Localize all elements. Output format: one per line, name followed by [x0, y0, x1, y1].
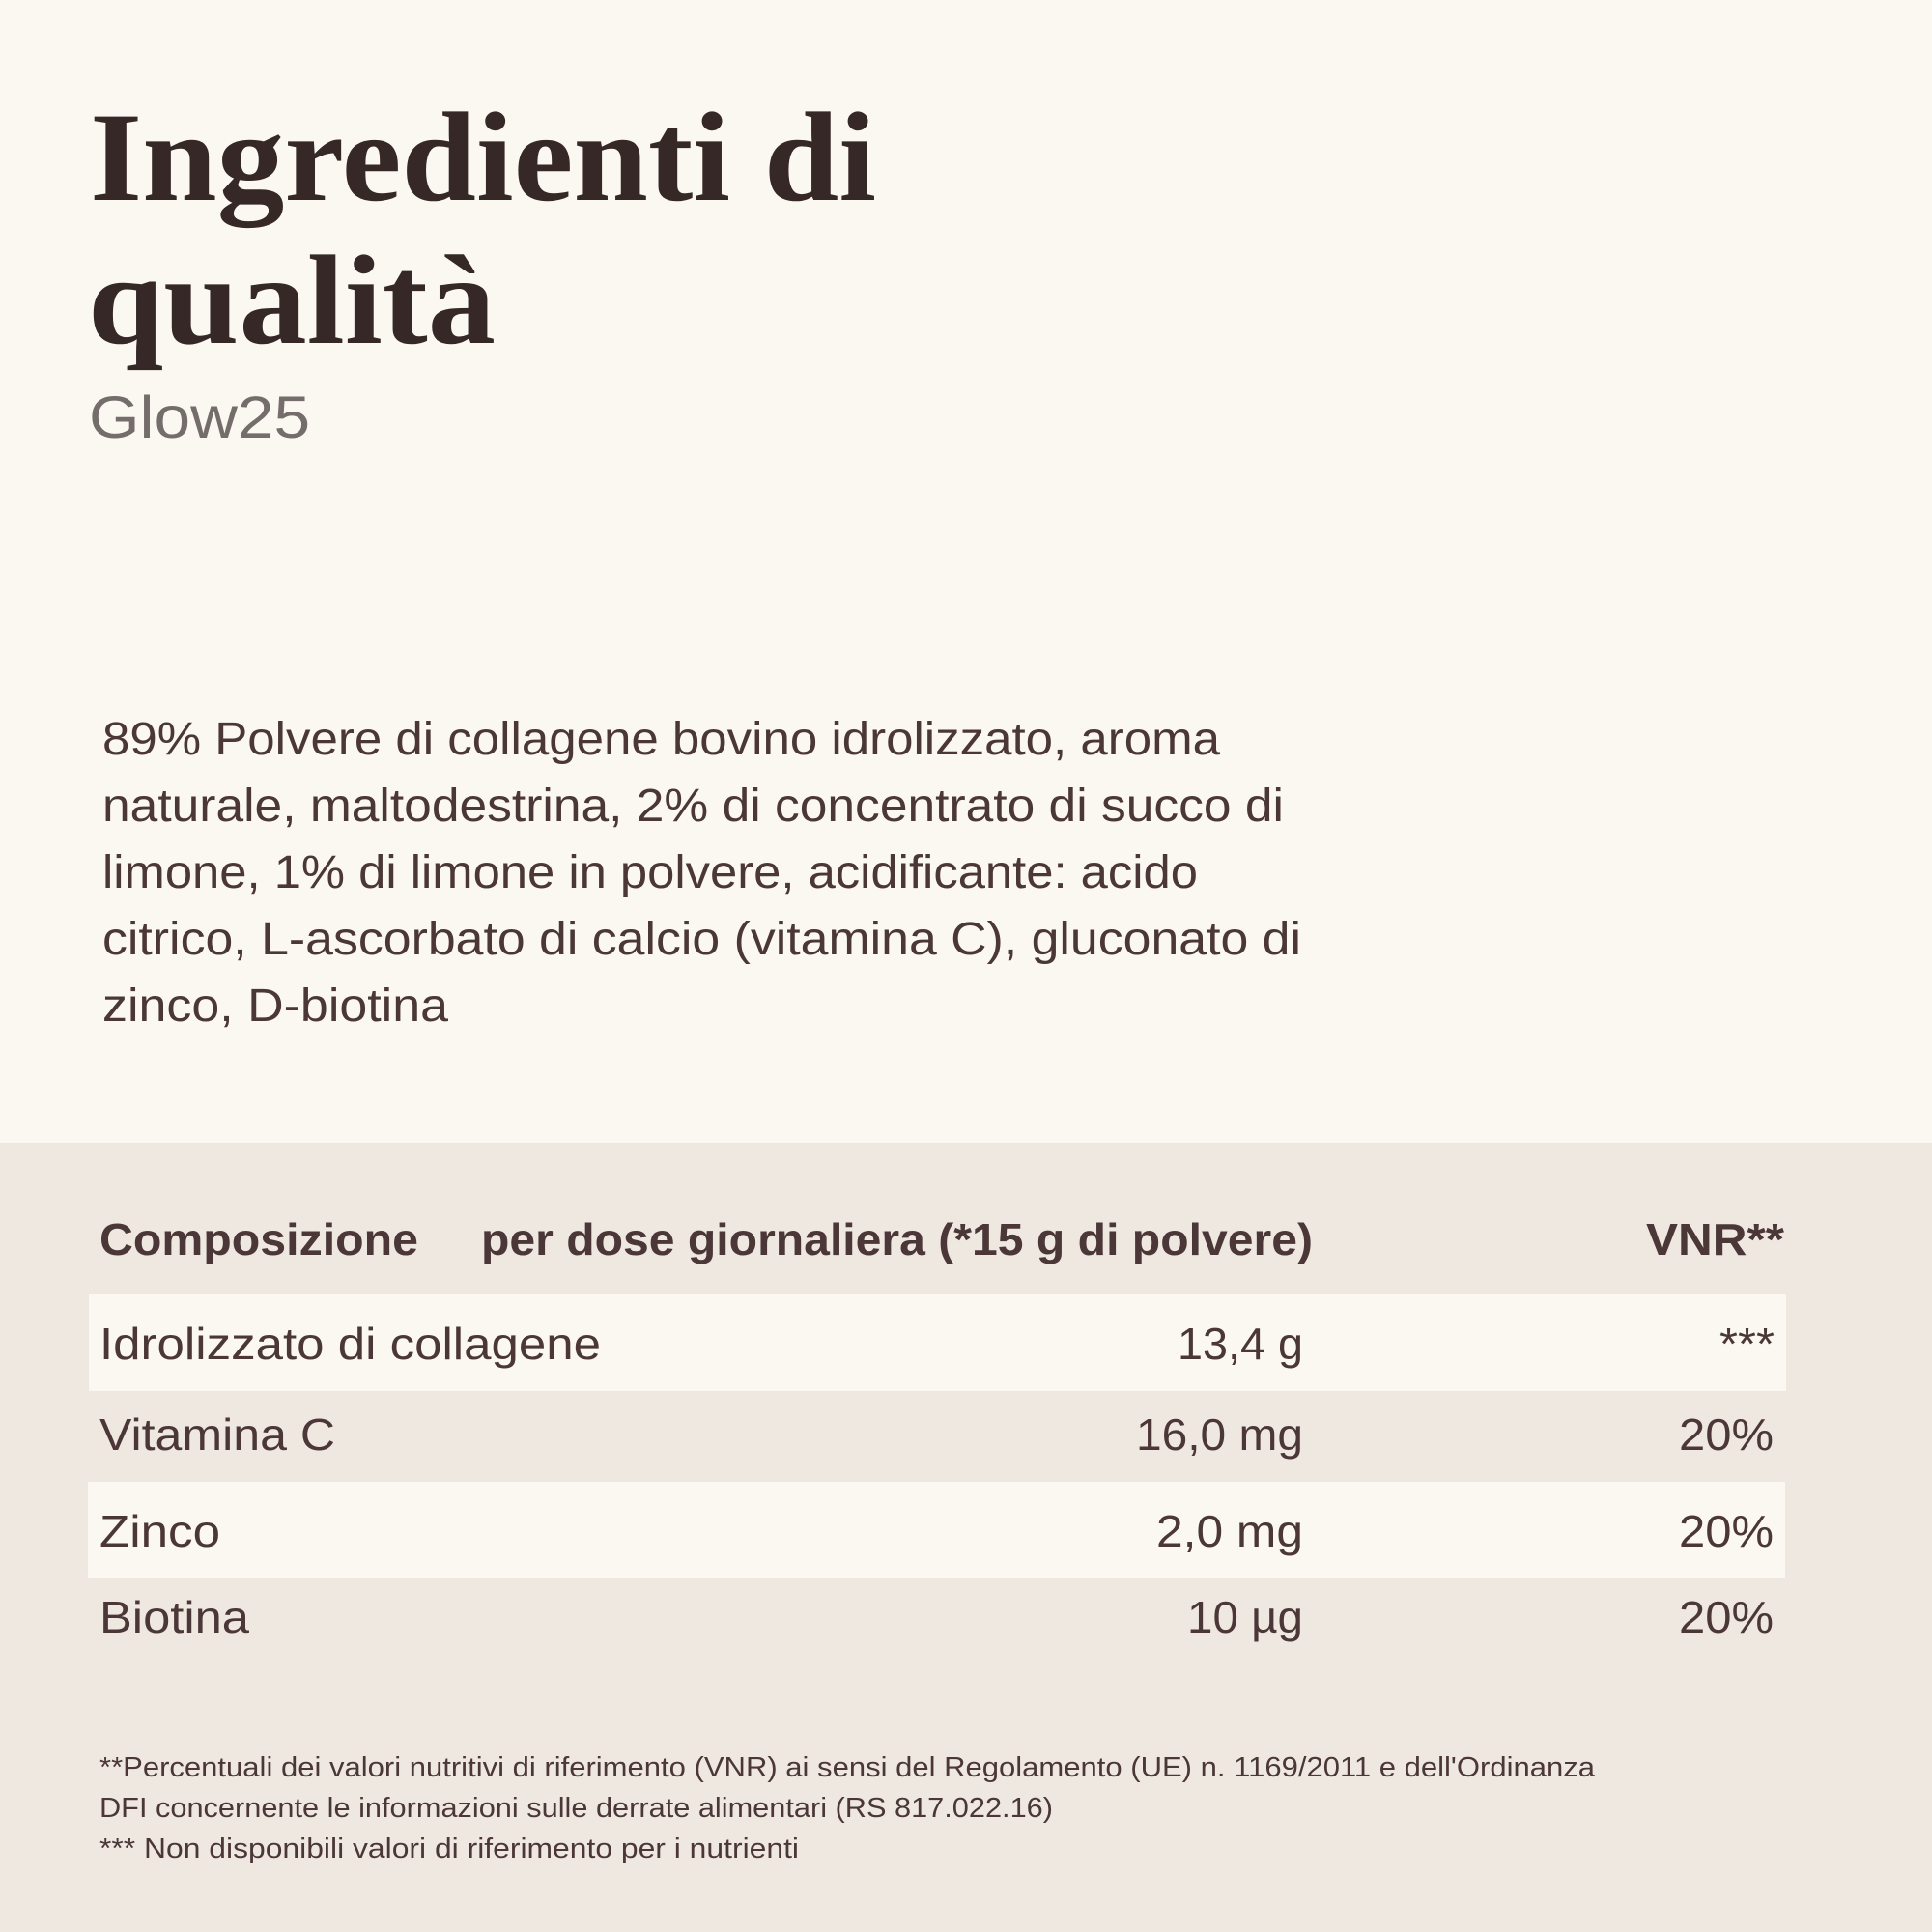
row: Vitamina C: [99, 1409, 1774, 1460]
row: Vitamina C: Vitamina C: [99, 1409, 335, 1460]
row: Idrolizzato di collagene: ***: [1719, 1319, 1775, 1369]
footnotes: [99, 1752, 1596, 1864]
row: Zinco: [88, 1482, 1785, 1578]
table header: VNR**: [1646, 1214, 1784, 1264]
text block: ingredient list: zinco, D-biotina: [102, 980, 448, 1032]
row: Vitamina C: 16,0 mg: [1136, 1409, 1303, 1460]
title: Ingredienti di: [90, 86, 876, 228]
text block: ingredient list: [102, 714, 1301, 1032]
table header: [99, 1214, 1784, 1264]
title: [88, 86, 876, 371]
row: Zinco: Zinco: [99, 1506, 220, 1556]
row: Zinco: 2,0 mg: [1156, 1506, 1303, 1556]
row: Biotina: 10 µg: [1187, 1592, 1303, 1642]
text block: ingredient list: limone, 1% di limone in polvere, acidificante: acido: [102, 847, 1198, 898]
footnotes: *** Non disponibili valori di riferimento per i nutrienti: [99, 1833, 799, 1864]
row: Idrolizzato di collagene: [89, 1294, 1786, 1391]
row: Biotina: Biotina: [99, 1592, 249, 1642]
row: Biotina: 20%: [1679, 1592, 1774, 1642]
row: Biotina: [99, 1592, 1774, 1642]
table header: per dose giornaliera (*15 g di polvere): [481, 1214, 1313, 1264]
footnotes: DFI concernente le informazioni sulle derrate alimentari (RS 817.022.16): [99, 1793, 1053, 1824]
title: qualità: [88, 229, 496, 371]
subtitle: Glow25: Glow25: [89, 384, 310, 450]
panel: composition table: [0, 1143, 1932, 1932]
table header: Composizione: [99, 1214, 418, 1264]
text block: ingredient list: naturale, maltodestrina, 2% di concentrato di succo di: [102, 781, 1284, 832]
row: Vitamina C: 20%: [1679, 1409, 1774, 1460]
text block: ingredient list: 89% Polvere di collagene bovino idrolizzato, aroma: [102, 714, 1220, 765]
row: Idrolizzato di collagene: 13,4 g: [1178, 1319, 1303, 1369]
text block: ingredient list: citrico, L-ascorbato di calcio (vitamina C), gluconato di: [102, 914, 1301, 965]
footnotes: **Percentuali dei valori nutritivi di riferimento (VNR) ai sensi del Regolamento (UE) n. 1169/2011 e dell'Ordinanza: [99, 1752, 1596, 1783]
row: Zinco: 20%: [1679, 1506, 1774, 1556]
row: Idrolizzato di collagene: Idrolizzato di collagene: [99, 1319, 601, 1369]
